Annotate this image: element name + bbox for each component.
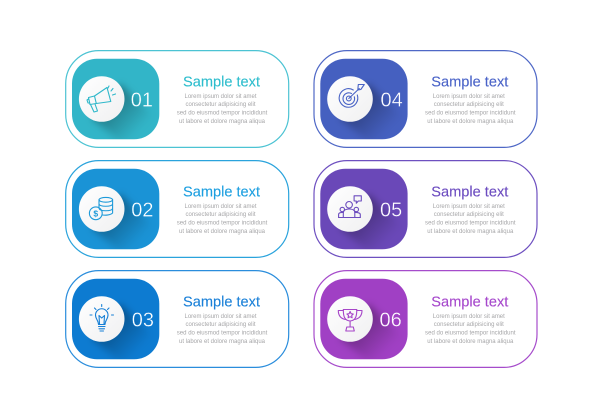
text block 02: ut labore et dolore magna aliqua <box>179 228 265 235</box>
icon: megaphone <box>87 86 116 112</box>
text block 04 <box>425 93 516 125</box>
number 02: 02 <box>131 200 154 222</box>
number 05: 05 <box>380 200 402 222</box>
icon: coins: $ <box>93 208 98 218</box>
text block 04: consectetur adipisicing elit <box>434 101 504 108</box>
text block 03: ut labore et dolore magna aliqua <box>179 338 265 345</box>
card outline 06 <box>314 271 537 367</box>
icon: people with speech bubble <box>339 196 361 218</box>
text block 01 <box>177 93 267 125</box>
icon disc 04 <box>327 76 373 122</box>
text block 02: consectetur adipisicing elit <box>186 211 256 218</box>
text block 05 <box>425 203 516 235</box>
shadow 01 <box>90 82 147 139</box>
card outline 01 <box>66 51 289 147</box>
icon disc 02 <box>79 186 124 232</box>
text block 04: sed do eiusmod tempor incididunt <box>425 110 516 117</box>
heading 04: Sample text <box>431 75 508 91</box>
colour block 02 <box>72 169 159 249</box>
text block 05: ut labore et dolore magna aliqua <box>427 228 513 235</box>
card outline 03 <box>66 271 289 367</box>
text block 06: Lorem ipsum dolor sit amet <box>433 313 505 320</box>
number 01: 01 <box>131 90 153 112</box>
colour block 03 <box>72 279 159 359</box>
icon disc 03 <box>79 296 124 342</box>
text block 03 <box>177 313 267 345</box>
text block 03: consectetur adipisicing elit <box>186 321 256 328</box>
card outline 05 <box>314 161 537 257</box>
text block 01: Lorem ipsum dolor sit amet <box>184 93 257 100</box>
heading 01: Sample text <box>183 75 260 91</box>
text block 05: sed do eiusmod tempor incididunt <box>425 220 516 227</box>
text block 04: ut labore et dolore magna aliqua <box>427 118 513 125</box>
heading 06: Sample text <box>431 295 508 311</box>
shadow 02 <box>90 192 147 249</box>
shadow 05 <box>338 192 394 249</box>
icon disc 01 <box>79 76 124 122</box>
panel: card 06 <box>314 271 537 367</box>
text block 03: sed do eiusmod tempor incididunt <box>177 330 267 337</box>
text block 02: Lorem ipsum dolor sit amet <box>184 203 257 210</box>
icon disc 06 <box>327 296 373 342</box>
panel: card 04 <box>314 51 537 147</box>
text block 02: sed do eiusmod tempor incididunt <box>177 220 267 227</box>
text block 01: consectetur adipisicing elit <box>186 101 256 108</box>
colour block 04 <box>320 59 408 139</box>
text block 06: ut labore et dolore magna aliqua <box>427 338 513 345</box>
icon: coins <box>89 197 113 220</box>
colour block 06 <box>320 279 408 359</box>
heading 02: Sample text <box>183 185 260 201</box>
text block 05: Lorem ipsum dolor sit amet <box>433 203 505 210</box>
number 04: 04 <box>381 90 403 112</box>
shadow 06 <box>338 302 394 359</box>
colour block 01 <box>72 59 159 139</box>
card outline 04 <box>314 51 537 147</box>
shadow 03 <box>90 302 147 359</box>
shadow 04 <box>338 82 394 139</box>
heading 03: Sample text <box>183 295 260 311</box>
heading 05: Sample text <box>431 185 508 201</box>
text block 06: consectetur adipisicing elit <box>434 321 504 328</box>
panel: card 05 <box>314 161 537 257</box>
text block 06 <box>425 313 516 345</box>
number 06: 06 <box>380 310 402 332</box>
icon disc 05 <box>327 186 373 232</box>
text block 03: Lorem ipsum dolor sit amet <box>184 313 257 320</box>
text block 01: ut labore et dolore magna aliqua <box>179 118 265 125</box>
text block 02 <box>177 203 267 235</box>
number 03: 03 <box>132 310 154 332</box>
panel: card 03 <box>66 271 289 367</box>
icon: light bulb <box>90 304 114 331</box>
icon: trophy <box>338 310 362 331</box>
text block 06: sed do eiusmod tempor incididunt <box>425 330 516 337</box>
text block 01: sed do eiusmod tempor incididunt <box>177 110 267 117</box>
text block 04: Lorem ipsum dolor sit amet <box>433 93 505 100</box>
panel: card 01 <box>66 51 289 147</box>
icon: target <box>339 84 364 107</box>
card outline 02 <box>66 161 289 257</box>
panel: card 02 <box>66 161 289 257</box>
colour block 05 <box>320 169 408 249</box>
text block 05: consectetur adipisicing elit <box>434 211 504 218</box>
